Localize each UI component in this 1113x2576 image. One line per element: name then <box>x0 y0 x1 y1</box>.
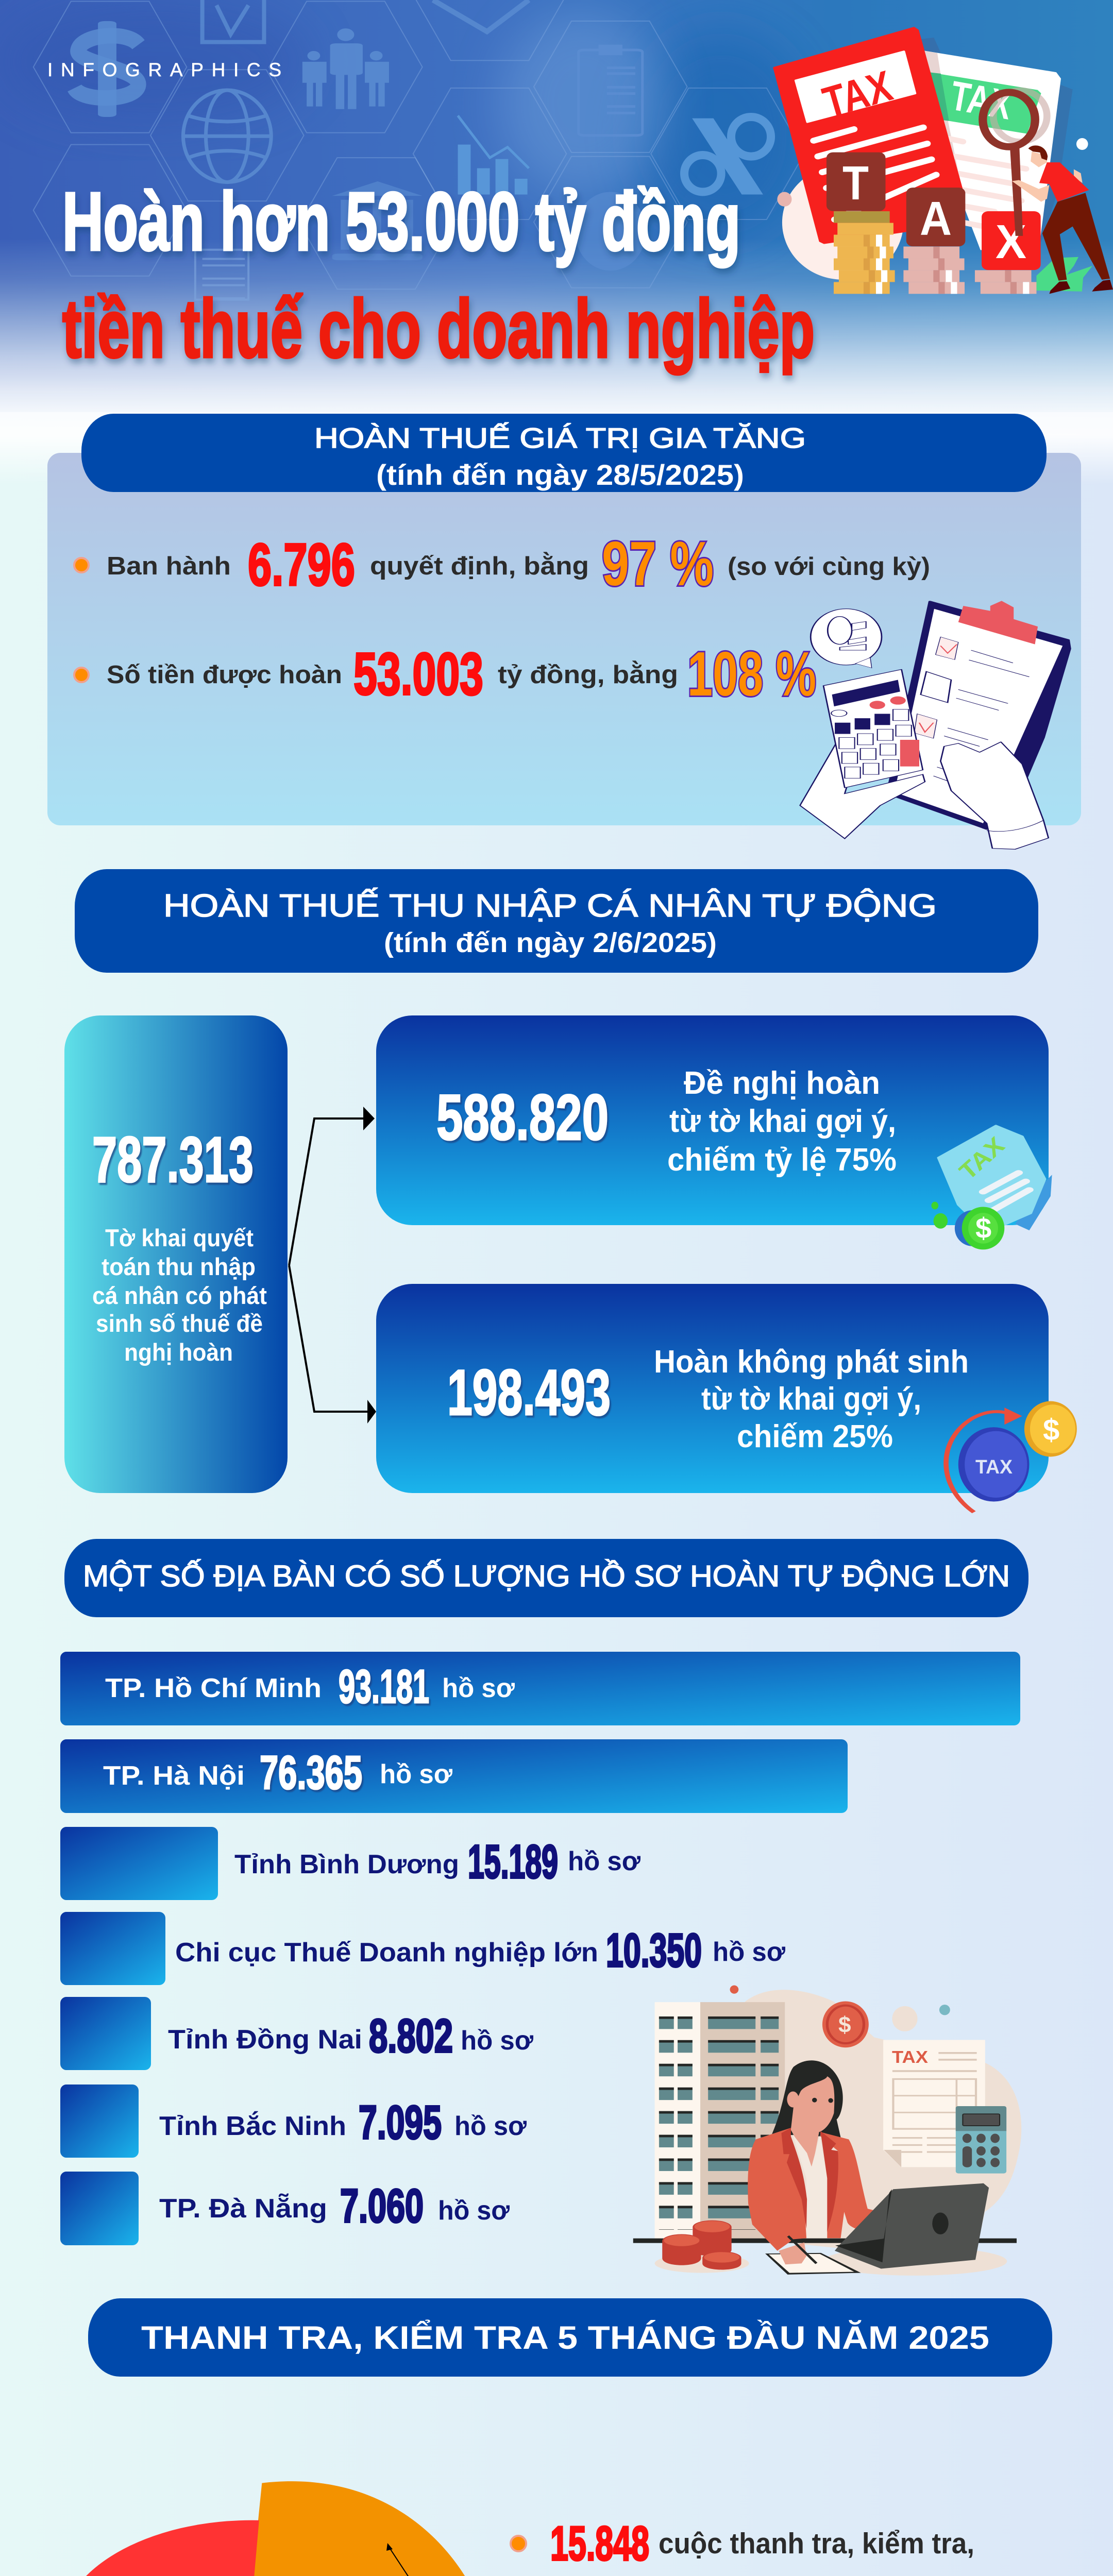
card: total declarations: toán thu nhập <box>102 1253 256 1280</box>
illustration: tax documents, blocks, coins and man with magnifier <box>774 28 1113 294</box>
icon: tax coin with arrow: TAX <box>975 1456 1013 1478</box>
panel: inspections first 5 months <box>58 2298 1083 2576</box>
bar: Bắc Ninh: Tỉnh Bắc Ninh <box>159 2111 346 2141</box>
icon: magnifier and man <box>983 90 1113 294</box>
leader line: pie to bullets <box>386 2543 1060 2576</box>
heading: regions <box>64 1539 1028 1617</box>
bar: Hồ Chí Minh: TP. Hồ Chí Minh <box>105 1673 322 1703</box>
text: block letter T: T <box>842 156 869 210</box>
heading: VAT refund <box>81 414 1047 492</box>
heading: PIT automatic refund: (tính đến ngày 2/6/2025) <box>384 927 717 958</box>
icon: tax sheet with green coin <box>931 1126 1052 1249</box>
text: block letter X: X <box>996 215 1026 268</box>
bullet: refund amount: 108 % <box>687 639 816 709</box>
bar: Chi cục Thuế Doanh nghiệp lớn: Chi cục Thuế Doanh nghiệp lớn <box>175 1938 598 1968</box>
bullet: decisions <box>74 529 930 599</box>
card: suggested refund: chiếm tỷ lệ 75% <box>667 1142 897 1178</box>
card: non-arising refund: chiếm 25% <box>737 1419 893 1454</box>
card: total declarations: Tờ khai quyết <box>105 1224 254 1251</box>
title: tiền thuế cho doanh nghiệp <box>62 282 815 375</box>
bullet: decisions: 97 % <box>602 529 714 599</box>
bar: Bắc Ninh <box>60 2084 527 2158</box>
bullet: decisions: quyết định, bằng <box>370 552 589 580</box>
icon: tax sheet with green coin: TAX <box>954 1131 1009 1185</box>
bar: Đồng Nai: hồ sơ <box>461 2026 533 2056</box>
card: non-arising refund: Hoàn không phát sinh <box>654 1344 969 1380</box>
panel: PIT automatic refund <box>64 869 1077 1512</box>
heading: PIT automatic refund: HOÀN THUẾ THU NHẬP CÁ NHÂN TỰ ĐỘNG <box>163 888 937 924</box>
card: total declarations: 787.313 <box>92 1124 254 1196</box>
panel: regions with most refunds <box>60 1539 1028 2276</box>
bullet: decisions: Ban hành <box>107 552 231 580</box>
bar: Bình Dương: 15.189 <box>468 1836 558 1888</box>
bar: Bình Dương: hồ sơ <box>568 1846 640 1876</box>
bar: Hồ Chí Minh: hồ sơ <box>442 1673 515 1703</box>
bar: Bắc Ninh: 7.095 <box>359 2096 442 2149</box>
card: suggested refund: 588.820 <box>436 1082 609 1154</box>
bar: Hồ Chí Minh: 93.181 <box>339 1660 429 1713</box>
icon: tax coin with arrow: $ <box>1043 1413 1059 1447</box>
bullet: refund amount: 53.003 <box>353 640 483 707</box>
panel background <box>47 453 1081 825</box>
bullet: inspections count: 15.848 <box>550 2516 649 2570</box>
heading: PIT automatic refund <box>75 869 1038 973</box>
bullet: decisions: 6.796 <box>248 531 355 598</box>
text: TAX on red sheet: TAX <box>818 61 897 127</box>
heading: VAT refund: HOÀN THUẾ GIÁ TRỊ GIA TĂNG <box>314 422 806 454</box>
bullet: inspections count <box>511 2516 974 2576</box>
bar: Chi cục Thuế Doanh nghiệp lớn <box>60 1912 785 1985</box>
card: suggested refund: Đề nghị hoàn <box>684 1065 880 1101</box>
bar: Đà Nẵng: 7.060 <box>340 2180 424 2232</box>
bar: Bắc Ninh: hồ sơ <box>454 2111 527 2141</box>
illustration: woman with laptop and tax form: TAX <box>892 2047 928 2066</box>
bar: Đồng Nai <box>60 1997 533 2070</box>
chart: 3D pie <box>58 2481 466 2576</box>
bullet: refund amount: tỷ đồng, bằng <box>498 660 678 689</box>
bar: Bình Dương <box>60 1827 640 1900</box>
illustration: woman with laptop and tax form <box>633 1985 1021 2276</box>
card: total declarations: cá nhân có phát <box>92 1282 267 1309</box>
heading: VAT refund: (tính đến ngày 28/5/2025) <box>376 459 744 491</box>
label: INFOGRAPHICS: INFOGRAPHICS <box>47 59 281 80</box>
bullet: decisions: (so với cùng kỳ) <box>728 553 930 581</box>
bullet: refund amount: Số tiền được hoàn <box>107 661 342 689</box>
title: Hoàn hơn 53.000 tỷ đồng <box>62 175 740 267</box>
card: non-arising refund <box>376 1284 1049 1493</box>
illustration: woman with laptop and tax form: $ <box>838 2012 851 2038</box>
bar: Hà Nội: 76.365 <box>260 1747 362 1799</box>
bar: Đồng Nai: Tỉnh Đồng Nai <box>168 2025 362 2055</box>
bullet: refund amount <box>74 639 816 709</box>
heading: regions: MỘT SỐ ĐỊA BÀN CÓ SỐ LƯỢNG HỒ SƠ HOÀN TỰ ĐỘNG LỚN <box>83 1560 1010 1593</box>
bar: Hà Nội: hồ sơ <box>380 1759 452 1789</box>
bullet: inspections count: cuộc thanh tra, kiểm tra, <box>659 2527 974 2560</box>
heading: inspections <box>88 2298 1052 2377</box>
card: non-arising refund: từ tờ khai gợi ý, <box>701 1381 921 1417</box>
hexagon pattern <box>33 0 804 300</box>
bar: Đà Nẵng <box>60 2172 510 2245</box>
header banner <box>0 0 1113 484</box>
panel: VAT refund <box>47 414 1081 849</box>
bar: Hồ Chí Minh <box>60 1652 1020 1725</box>
bar: Đà Nẵng: hồ sơ <box>438 2196 510 2226</box>
bar: Chi cục Thuế Doanh nghiệp lớn: 10.350 <box>606 1924 702 1977</box>
card: suggested refund: từ tờ khai gợi ý, <box>669 1104 896 1139</box>
arrows: split to two cards <box>289 1107 376 1423</box>
title <box>62 175 815 375</box>
bar: Bình Dương: Tỉnh Bình Dương <box>234 1850 459 1879</box>
bar: Chi cục Thuế Doanh nghiệp lớn: hồ sơ <box>713 1937 785 1967</box>
icon: clipboard, calculator and hands <box>800 601 1070 849</box>
card: total declarations: nghị hoàn <box>124 1338 233 1366</box>
text: TAX on green band: TAX <box>947 73 1015 128</box>
bar: Đà Nẵng: TP. Đà Nẵng <box>159 2193 327 2224</box>
text: block letter A: A <box>920 192 952 245</box>
card: total declarations <box>64 1015 288 1493</box>
bar: Đồng Nai: 8.802 <box>369 2010 453 2062</box>
card: total declarations: sinh số thuế đề <box>96 1310 263 1337</box>
icon: tax coin with arrow <box>946 1401 1077 1512</box>
bar: Hà Nội <box>60 1739 848 1813</box>
card: suggested refund <box>376 1015 1049 1225</box>
icon: tax sheet with green coin: $ <box>975 1212 991 1244</box>
heading: inspections: THANH TRA, KIỂM TRA 5 THÁNG ĐẦU NĂM 2025 <box>141 2319 989 2356</box>
bar: Hà Nội: TP. Hà Nội <box>103 1761 245 1791</box>
card: non-arising refund: 198.493 <box>447 1357 611 1429</box>
